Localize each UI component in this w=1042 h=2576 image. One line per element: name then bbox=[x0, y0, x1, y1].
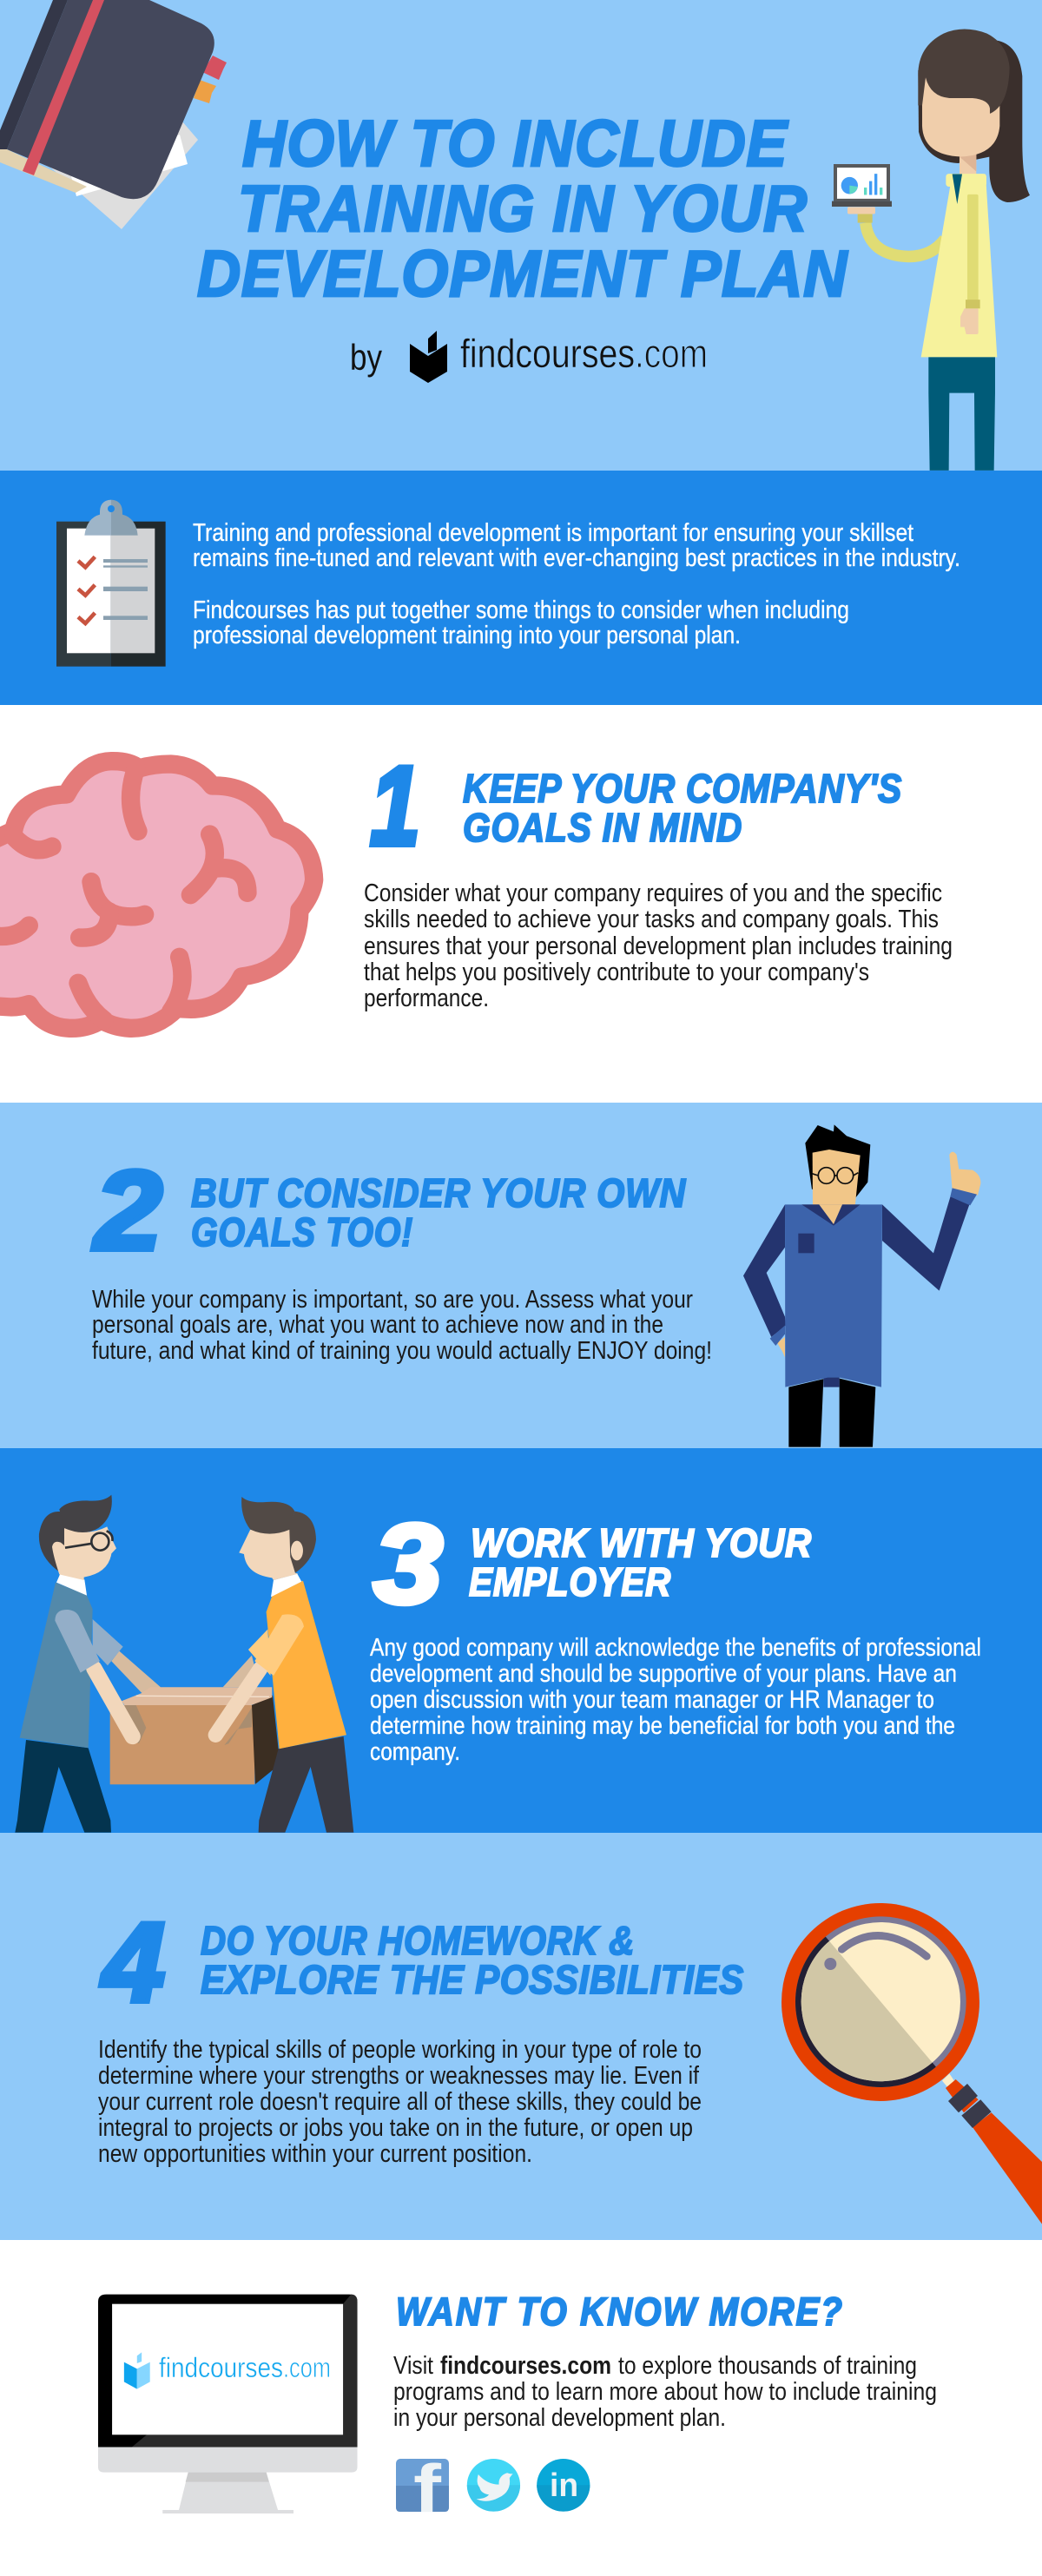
text: step 4: determine where your strengths or weaknesses may lie. Even if bbox=[98, 2062, 700, 2090]
icon: desktop monitor with logo bbox=[98, 2295, 358, 2513]
text: step 4: new opportunities within your current position. bbox=[98, 2140, 532, 2168]
text: step 3: company. bbox=[370, 1738, 460, 1766]
panel: intro bbox=[0, 471, 1042, 705]
title: DEVELOPMENT PLAN bbox=[197, 237, 848, 310]
heading: step 1 bbox=[463, 766, 902, 850]
byline logo bbox=[350, 331, 708, 383]
heading: want to know more: WANT TO KNOW MORE? bbox=[396, 2289, 844, 2334]
text: step 4 bbox=[98, 2036, 702, 2168]
text: step 3 bbox=[370, 1634, 981, 1766]
text: step 4: integral to projects or jobs you take on in the future, or open up bbox=[98, 2114, 693, 2142]
text: step 1: skills needed to achieve your tasks and company goals. This bbox=[364, 906, 939, 933]
text: step 3: determine how training may be beneficial for both you and the bbox=[370, 1712, 955, 1740]
text: step 4: your current role doesn't require all of these skills, they could be bbox=[98, 2088, 702, 2116]
byline logo: by bbox=[350, 337, 382, 378]
intro text: Findcourses has put together some things to consider when including bbox=[193, 596, 849, 624]
text: step 1: that helps you positively contribute to your company's bbox=[364, 959, 869, 986]
text: step 2: personal goals are, what you want to achieve now and in the bbox=[92, 1311, 663, 1339]
heading: step 3 bbox=[469, 1520, 812, 1604]
byline logo: findcourses bbox=[460, 331, 635, 376]
intro text: professional development training into your personal plan. bbox=[193, 622, 741, 649]
heading: step 1: KEEP YOUR COMPANY'S bbox=[463, 766, 902, 811]
text: step 3: open discussion with your team manager or HR Manager to bbox=[370, 1686, 934, 1714]
byline logo: .com bbox=[635, 331, 708, 376]
text: step 2: future, and what kind of training you would actually ENJOY doing! bbox=[92, 1337, 712, 1365]
title: TRAINING IN YOUR bbox=[238, 172, 808, 245]
intro text: Training and professional development is important for ensuring your skillset bbox=[193, 519, 913, 547]
icon: man with thumbs up bbox=[743, 1124, 980, 1447]
text: step 4: Identify the typical skills of people working in your type of role to bbox=[98, 2036, 702, 2064]
icon: brain bbox=[0, 761, 314, 1028]
text: step 1: Consider what your company requires of you and the specific bbox=[364, 880, 942, 907]
text: step 1: performance. bbox=[364, 985, 489, 1012]
icon: clipboard checklist bbox=[56, 500, 166, 667]
number 1: 1 bbox=[370, 742, 420, 869]
panel: step 1 bbox=[0, 705, 1042, 1103]
text: step 2 bbox=[92, 1286, 712, 1365]
icon: woman holding tablet bbox=[832, 30, 1030, 471]
panel: step 4 bbox=[0, 1833, 1042, 2240]
number 2: 2 bbox=[92, 1147, 162, 1274]
text: footer: to explore thousands of training bbox=[618, 2352, 917, 2380]
heading: step 4 bbox=[201, 1918, 744, 2002]
icon: twitter bbox=[467, 2459, 520, 2512]
heading: step 2: GOALS TOO! bbox=[191, 1209, 413, 1255]
heading: step 4: DO YOUR HOMEWORK & bbox=[201, 1918, 635, 1963]
heading: step 1: GOALS IN MIND bbox=[463, 805, 742, 850]
icon: notebook with papers bbox=[0, 0, 227, 229]
intro text bbox=[193, 519, 960, 649]
text: footer: Visit bbox=[393, 2352, 433, 2380]
panel: footer bbox=[0, 2240, 1042, 2576]
icon: desktop monitor with logo: .com bbox=[283, 2352, 331, 2383]
panel: step 2 bbox=[0, 1103, 1042, 1448]
text: step 1: ensures that your personal development plan includes training bbox=[364, 932, 953, 960]
icon: facebook bbox=[396, 2450, 449, 2527]
number 4: 4 bbox=[100, 1899, 165, 2026]
illustration: two people carrying a box bbox=[15, 1495, 353, 1833]
title bbox=[197, 107, 848, 310]
icon: linkedin bbox=[537, 2459, 590, 2512]
panel: step 3 bbox=[0, 1448, 1042, 1833]
text: footer: findcourses.com bbox=[440, 2352, 611, 2380]
text: footer bbox=[393, 2352, 937, 2432]
text: footer: programs and to learn more about how to include training bbox=[393, 2378, 937, 2406]
title: HOW TO INCLUDE bbox=[242, 107, 788, 180]
heading: step 4: EXPLORE THE POSSIBILITIES bbox=[201, 1957, 744, 2002]
icon: magnifying glass bbox=[782, 1903, 1042, 2224]
heading: step 2: BUT CONSIDER YOUR OWN bbox=[191, 1170, 686, 1216]
text: footer: in your personal development plan. bbox=[393, 2404, 726, 2432]
panel: hero header bbox=[0, 0, 1042, 471]
icon: desktop monitor with logo: findcourses bbox=[159, 2352, 283, 2383]
text: step 2: While your company is important, so are you. Assess what your bbox=[92, 1286, 693, 1314]
number 3: 3 bbox=[373, 1500, 443, 1627]
text: step 3: development and should be supportive of your plans. Have an bbox=[370, 1660, 957, 1688]
icon: facebook: f bbox=[413, 2450, 442, 2527]
icon: linkedin: in bbox=[550, 2467, 578, 2504]
heading: step 2 bbox=[191, 1170, 686, 1255]
heading: step 3: EMPLOYER bbox=[469, 1559, 671, 1604]
text: step 1 bbox=[364, 880, 953, 1012]
heading: step 3: WORK WITH YOUR bbox=[471, 1520, 812, 1565]
